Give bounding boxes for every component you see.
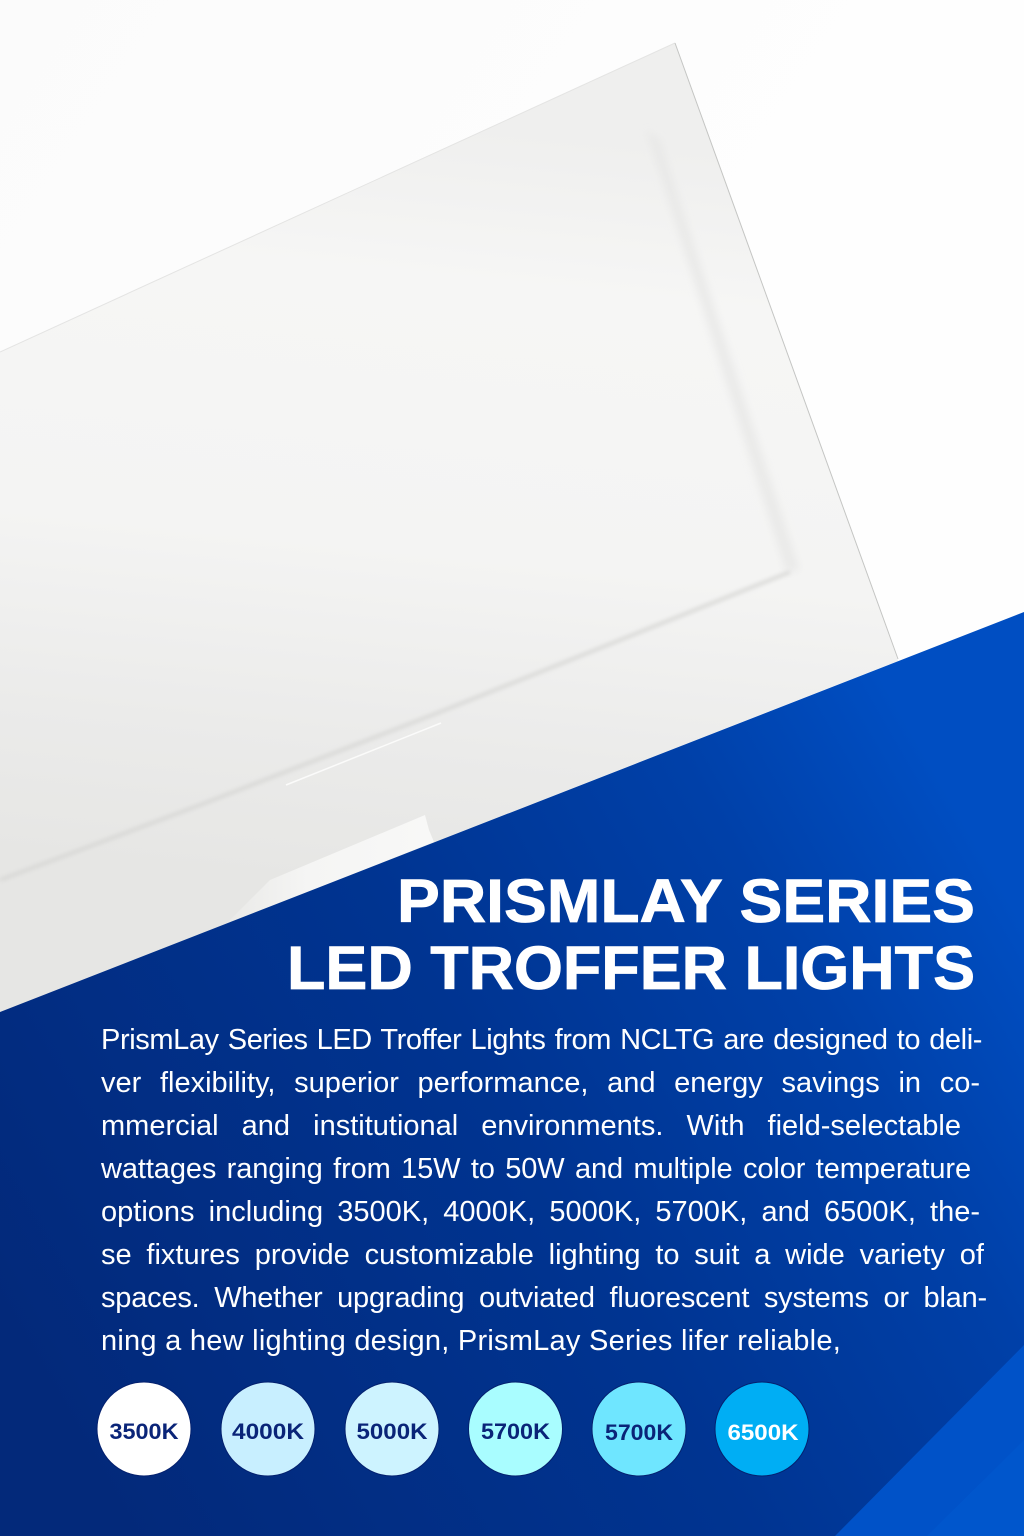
panel right edge [675, 43, 898, 659]
badge: 5700K second [592, 1382, 686, 1476]
body text block: wattages ranging from 15W to 50W and multiple color temperature [101, 1153, 971, 1185]
panel top edge [0, 43, 675, 352]
decorative second band [927, 1440, 1024, 1536]
badge: 4000K: 4000K [232, 1419, 304, 1444]
badge: 5000K: 5000K [356, 1419, 428, 1444]
title [287, 867, 975, 1002]
title line 1: PRISMLAY SERIES [397, 867, 975, 935]
body text block: se fixtures provide customizable lighting to suit a wide variety of [101, 1239, 984, 1271]
inner frame crease [0, 572, 790, 880]
badge: 4000K [221, 1382, 315, 1476]
lower frame highlight [225, 815, 434, 925]
decorative lighter band [835, 1345, 1024, 1536]
lower frame highlight line [286, 723, 441, 785]
body text block [101, 1024, 987, 1357]
badge: 5700K [468, 1382, 562, 1476]
badge: 5700K second: 5700K [605, 1420, 673, 1445]
title line 2: LED TROFFER LIGHTS [287, 934, 975, 1002]
body text block: PrismLay Series LED Troffer Lights from NCLTG are designed to deli- [101, 1024, 982, 1056]
color temperature badges [97, 1382, 809, 1476]
badge: 6500K [715, 1382, 809, 1476]
inner frame shadow [646, 130, 800, 572]
body text block: options including 3500K, 4000K, 5000K, 5700K, and 6500K, the- [101, 1196, 980, 1228]
badge: 5700K: 5700K [481, 1419, 550, 1444]
body text block: mmercial and institutional environments. With field-selectable [101, 1110, 961, 1142]
badge: 6500K: 6500K [728, 1420, 799, 1445]
badge: 3500K: 3500K [110, 1419, 179, 1444]
panel: blue diagonal section [0, 612, 1024, 1536]
badge: 5000K [345, 1382, 439, 1476]
body text block: ver flexibility, superior performance, and energy savings in co- [101, 1067, 980, 1099]
body text block: spaces. Whether upgrading outviated fluorescent systems or blan- [101, 1282, 987, 1314]
panel: LED troffer light fixture [0, 43, 898, 1012]
badge: 3500K [97, 1382, 191, 1476]
body text block: ning a hew lighting design, PrismLay Series lifer reliable, [101, 1325, 841, 1357]
